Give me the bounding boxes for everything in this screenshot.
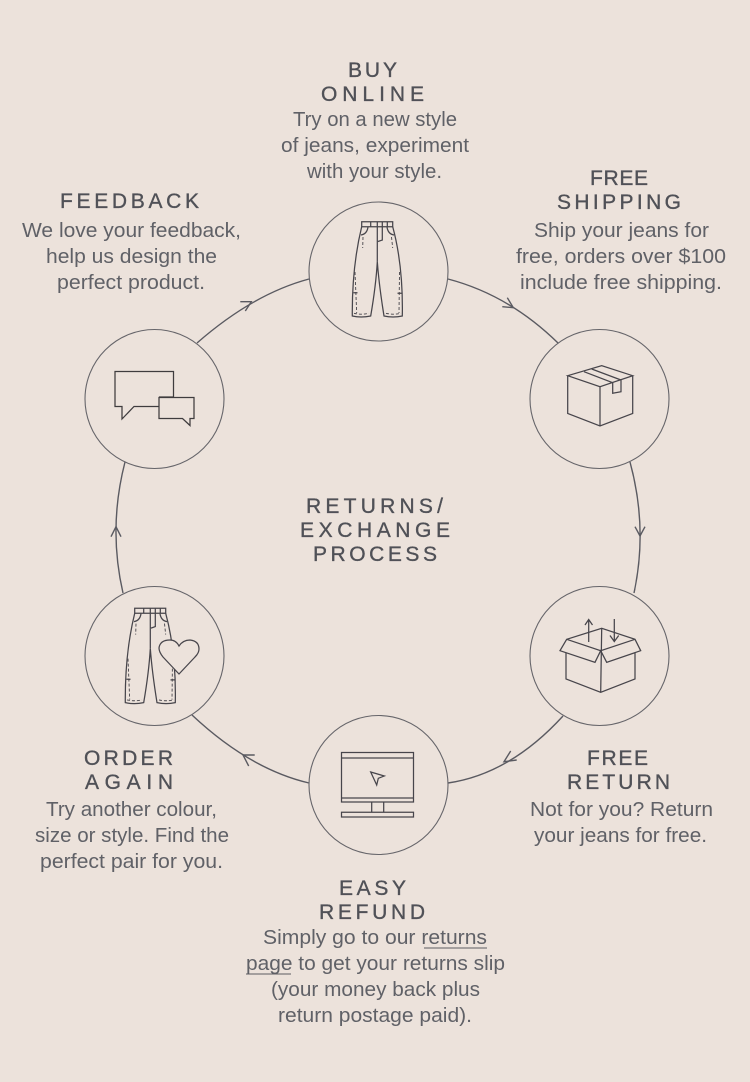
text: easy refund description xyxy=(246,927,505,1027)
text: free shipping description xyxy=(516,220,726,294)
arrow: order again to feedback xyxy=(111,462,125,593)
text: free return description: your jeans for free. xyxy=(534,825,707,847)
icon: parcel box xyxy=(530,330,669,468)
text: feedback description xyxy=(22,220,241,294)
heading: free return: FREE xyxy=(587,747,648,770)
arrow: free return to easy refund xyxy=(448,716,563,783)
step: easy refund xyxy=(246,716,505,1027)
arrow: easy refund to order again xyxy=(192,715,309,783)
heading: free shipping: SHIPPING xyxy=(557,191,681,214)
center title: PROCESS xyxy=(313,543,437,566)
arrow: free shipping to free return xyxy=(630,462,645,593)
heading: buy online: ONLINE xyxy=(321,83,424,106)
step: order again xyxy=(35,586,229,873)
arrow: buy online to free shipping xyxy=(448,279,558,343)
text: easy refund description: Simply go to our returns xyxy=(263,927,487,949)
icon: jeans xyxy=(309,202,448,341)
step: feedback xyxy=(22,190,241,468)
text: buy online description: Try on a new style xyxy=(293,109,457,131)
heading: order again: AGAIN xyxy=(85,771,173,794)
heading: easy refund xyxy=(319,877,425,924)
icon: open box with arrows xyxy=(530,586,669,726)
text: free return description xyxy=(530,799,713,847)
text: feedback description: We love your feedback, xyxy=(22,220,241,242)
text: order again description: perfect pair for you. xyxy=(40,851,223,873)
heading: buy online xyxy=(321,59,424,106)
center title: RETURNS/ xyxy=(306,495,443,518)
cycle ring with arrows xyxy=(111,279,645,783)
icon: jeans with heart xyxy=(85,586,224,726)
heading: order again xyxy=(84,747,173,794)
text: easy refund description: (your money back plus xyxy=(271,979,480,1001)
heading: order again: ORDER xyxy=(84,747,173,770)
text: easy refund description: page to get your returns slip xyxy=(246,953,505,975)
heading: free shipping: FREE xyxy=(590,167,648,190)
heading: buy online: BUY xyxy=(348,59,397,82)
heading: easy refund: EASY xyxy=(339,877,406,900)
text: feedback description: help us design the xyxy=(46,246,217,268)
heading: feedback: FEEDBACK xyxy=(60,190,199,213)
text: free shipping description: Ship your jeans for xyxy=(534,220,709,242)
text: order again description: size or style. Find the xyxy=(35,825,229,847)
heading: free shipping xyxy=(557,167,681,214)
step: free return xyxy=(530,586,713,847)
text: free shipping description: include free shipping. xyxy=(520,272,722,294)
text: feedback description: perfect product. xyxy=(57,272,205,294)
heading: free return: RETURN xyxy=(567,771,670,794)
text: order again description xyxy=(35,799,229,873)
text: easy refund description: return postage paid). xyxy=(278,1005,472,1027)
text: order again description: Try another colour, xyxy=(46,799,217,821)
arrow: feedback to buy online xyxy=(197,279,309,343)
step: free shipping xyxy=(516,167,726,468)
heading: free return xyxy=(567,747,670,794)
icon: speech bubbles xyxy=(85,330,224,468)
icon: computer monitor xyxy=(309,716,448,854)
center title xyxy=(300,495,450,566)
step: buy online xyxy=(281,59,469,341)
text: free shipping description: free, orders over $100 xyxy=(516,246,726,268)
center title: EXCHANGE xyxy=(300,519,450,542)
text: free return description: Not for you? Return xyxy=(530,799,713,821)
text: buy online description: with your style. xyxy=(306,161,442,183)
heading: easy refund: REFUND xyxy=(319,901,425,924)
text: buy online description xyxy=(281,109,469,183)
text: buy online description: of jeans, experiment xyxy=(281,135,469,157)
